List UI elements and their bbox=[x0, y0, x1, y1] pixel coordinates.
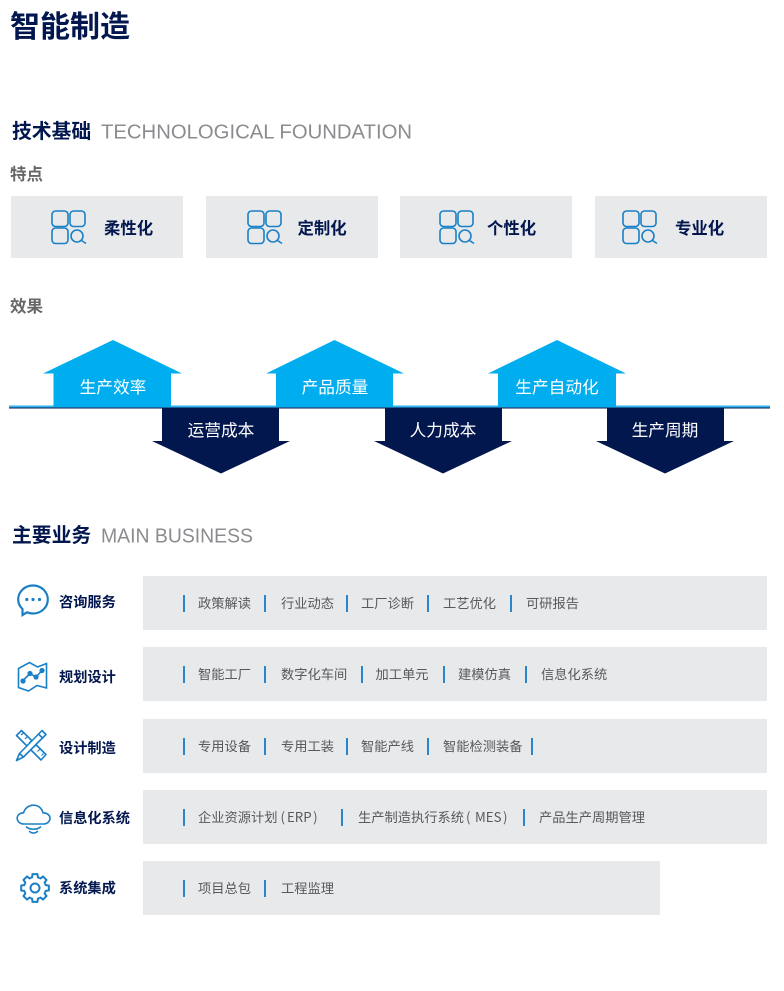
label: production efficiency: 生产效率 bbox=[80, 378, 146, 397]
item: 智能检测装备 bbox=[443, 736, 523, 754]
item bar bbox=[143, 861, 660, 915]
icon: ruler and pencil bbox=[16, 730, 47, 762]
item: 行业动态 bbox=[281, 593, 334, 612]
row: consulting bbox=[17, 576, 767, 630]
effects diagram bbox=[9, 340, 770, 474]
card: customization bbox=[206, 196, 378, 258]
icon: cloud bbox=[16, 804, 51, 834]
item: 企业资源计划(ERP) bbox=[198, 807, 318, 826]
heading: main business bbox=[12, 524, 253, 548]
row: system integration bbox=[20, 861, 660, 915]
card: personalization bbox=[400, 196, 572, 258]
heading text: english: MAIN BUSINESS bbox=[101, 524, 253, 548]
row label: 咨询服务 bbox=[59, 595, 116, 611]
item: 建模仿真 bbox=[458, 664, 511, 683]
item: 产品生产周期管理 bbox=[539, 807, 645, 826]
baseline bbox=[9, 406, 770, 408]
item: 工程监理 bbox=[281, 878, 334, 897]
item: 加工单元 bbox=[376, 664, 429, 683]
row label: 设计制造 bbox=[59, 741, 116, 757]
label: operating cost: 运营成本 bbox=[188, 421, 254, 440]
subheading: effects: 效果 bbox=[10, 298, 43, 316]
row: planning bbox=[18, 647, 767, 701]
item: 专用工装 bbox=[281, 736, 334, 754]
label: production cycle: 生产周期 bbox=[632, 421, 698, 440]
subheading: features: 特点 bbox=[10, 166, 43, 184]
arrow up: production automation bbox=[488, 340, 626, 407]
arrow down: production cycle bbox=[596, 408, 734, 474]
icon: grid search bbox=[439, 210, 474, 244]
heading text: chinese: 主要业务 bbox=[12, 525, 91, 547]
heading text: english: TECHNOLOGICAL FOUNDATION bbox=[101, 120, 412, 144]
label: production automation: 生产自动化 bbox=[515, 378, 599, 397]
arrow up: product quality bbox=[266, 340, 404, 407]
item: 政策解读 bbox=[198, 593, 251, 612]
card label: 个性化 bbox=[487, 220, 536, 238]
icon: map chart bbox=[18, 662, 48, 692]
item: 生产制造执行系统( MES) bbox=[358, 807, 507, 826]
card: flexibility bbox=[11, 196, 183, 258]
row label: 规划设计 bbox=[59, 670, 116, 686]
item: 工艺优化 bbox=[443, 593, 496, 612]
item: 智能工厂 bbox=[198, 664, 251, 683]
icon: speech bubble bbox=[17, 584, 49, 617]
arrow down: operating cost bbox=[152, 408, 290, 474]
arrow up: production efficiency bbox=[43, 340, 182, 407]
item: 数字化车间 bbox=[281, 664, 347, 683]
item: 项目总包 bbox=[198, 878, 251, 897]
row label: 系统集成 bbox=[59, 881, 116, 897]
label: labor cost: 人力成本 bbox=[410, 421, 476, 440]
item: 智能产线 bbox=[361, 736, 414, 754]
item: 工厂诊断 bbox=[361, 593, 414, 612]
row label: 信息化系统 bbox=[59, 811, 130, 827]
row: information systems bbox=[16, 790, 767, 844]
icon: grid search bbox=[51, 210, 86, 244]
item: 可研报告 bbox=[526, 593, 579, 612]
item: 信息化系统 bbox=[541, 664, 607, 683]
item: 专用设备 bbox=[198, 736, 251, 754]
arrow down: labor cost bbox=[374, 408, 512, 474]
row: design and manufacturing bbox=[16, 719, 767, 773]
card label: 柔性化 bbox=[104, 220, 153, 238]
icon: gear bbox=[20, 873, 50, 903]
heading: technological foundation bbox=[12, 120, 412, 144]
title: 智能制造 bbox=[10, 11, 130, 44]
item bar bbox=[143, 576, 767, 630]
card label: 定制化 bbox=[298, 220, 347, 238]
label: product quality: 产品质量 bbox=[302, 378, 368, 397]
item bar bbox=[143, 718, 767, 772]
card: specialization bbox=[595, 196, 767, 258]
card label: 专业化 bbox=[675, 220, 724, 238]
icon: grid search bbox=[622, 210, 658, 244]
heading text: chinese: 技术基础 bbox=[12, 121, 91, 143]
item bar bbox=[143, 790, 767, 844]
icon: grid search bbox=[247, 210, 282, 244]
item bar bbox=[143, 647, 767, 701]
